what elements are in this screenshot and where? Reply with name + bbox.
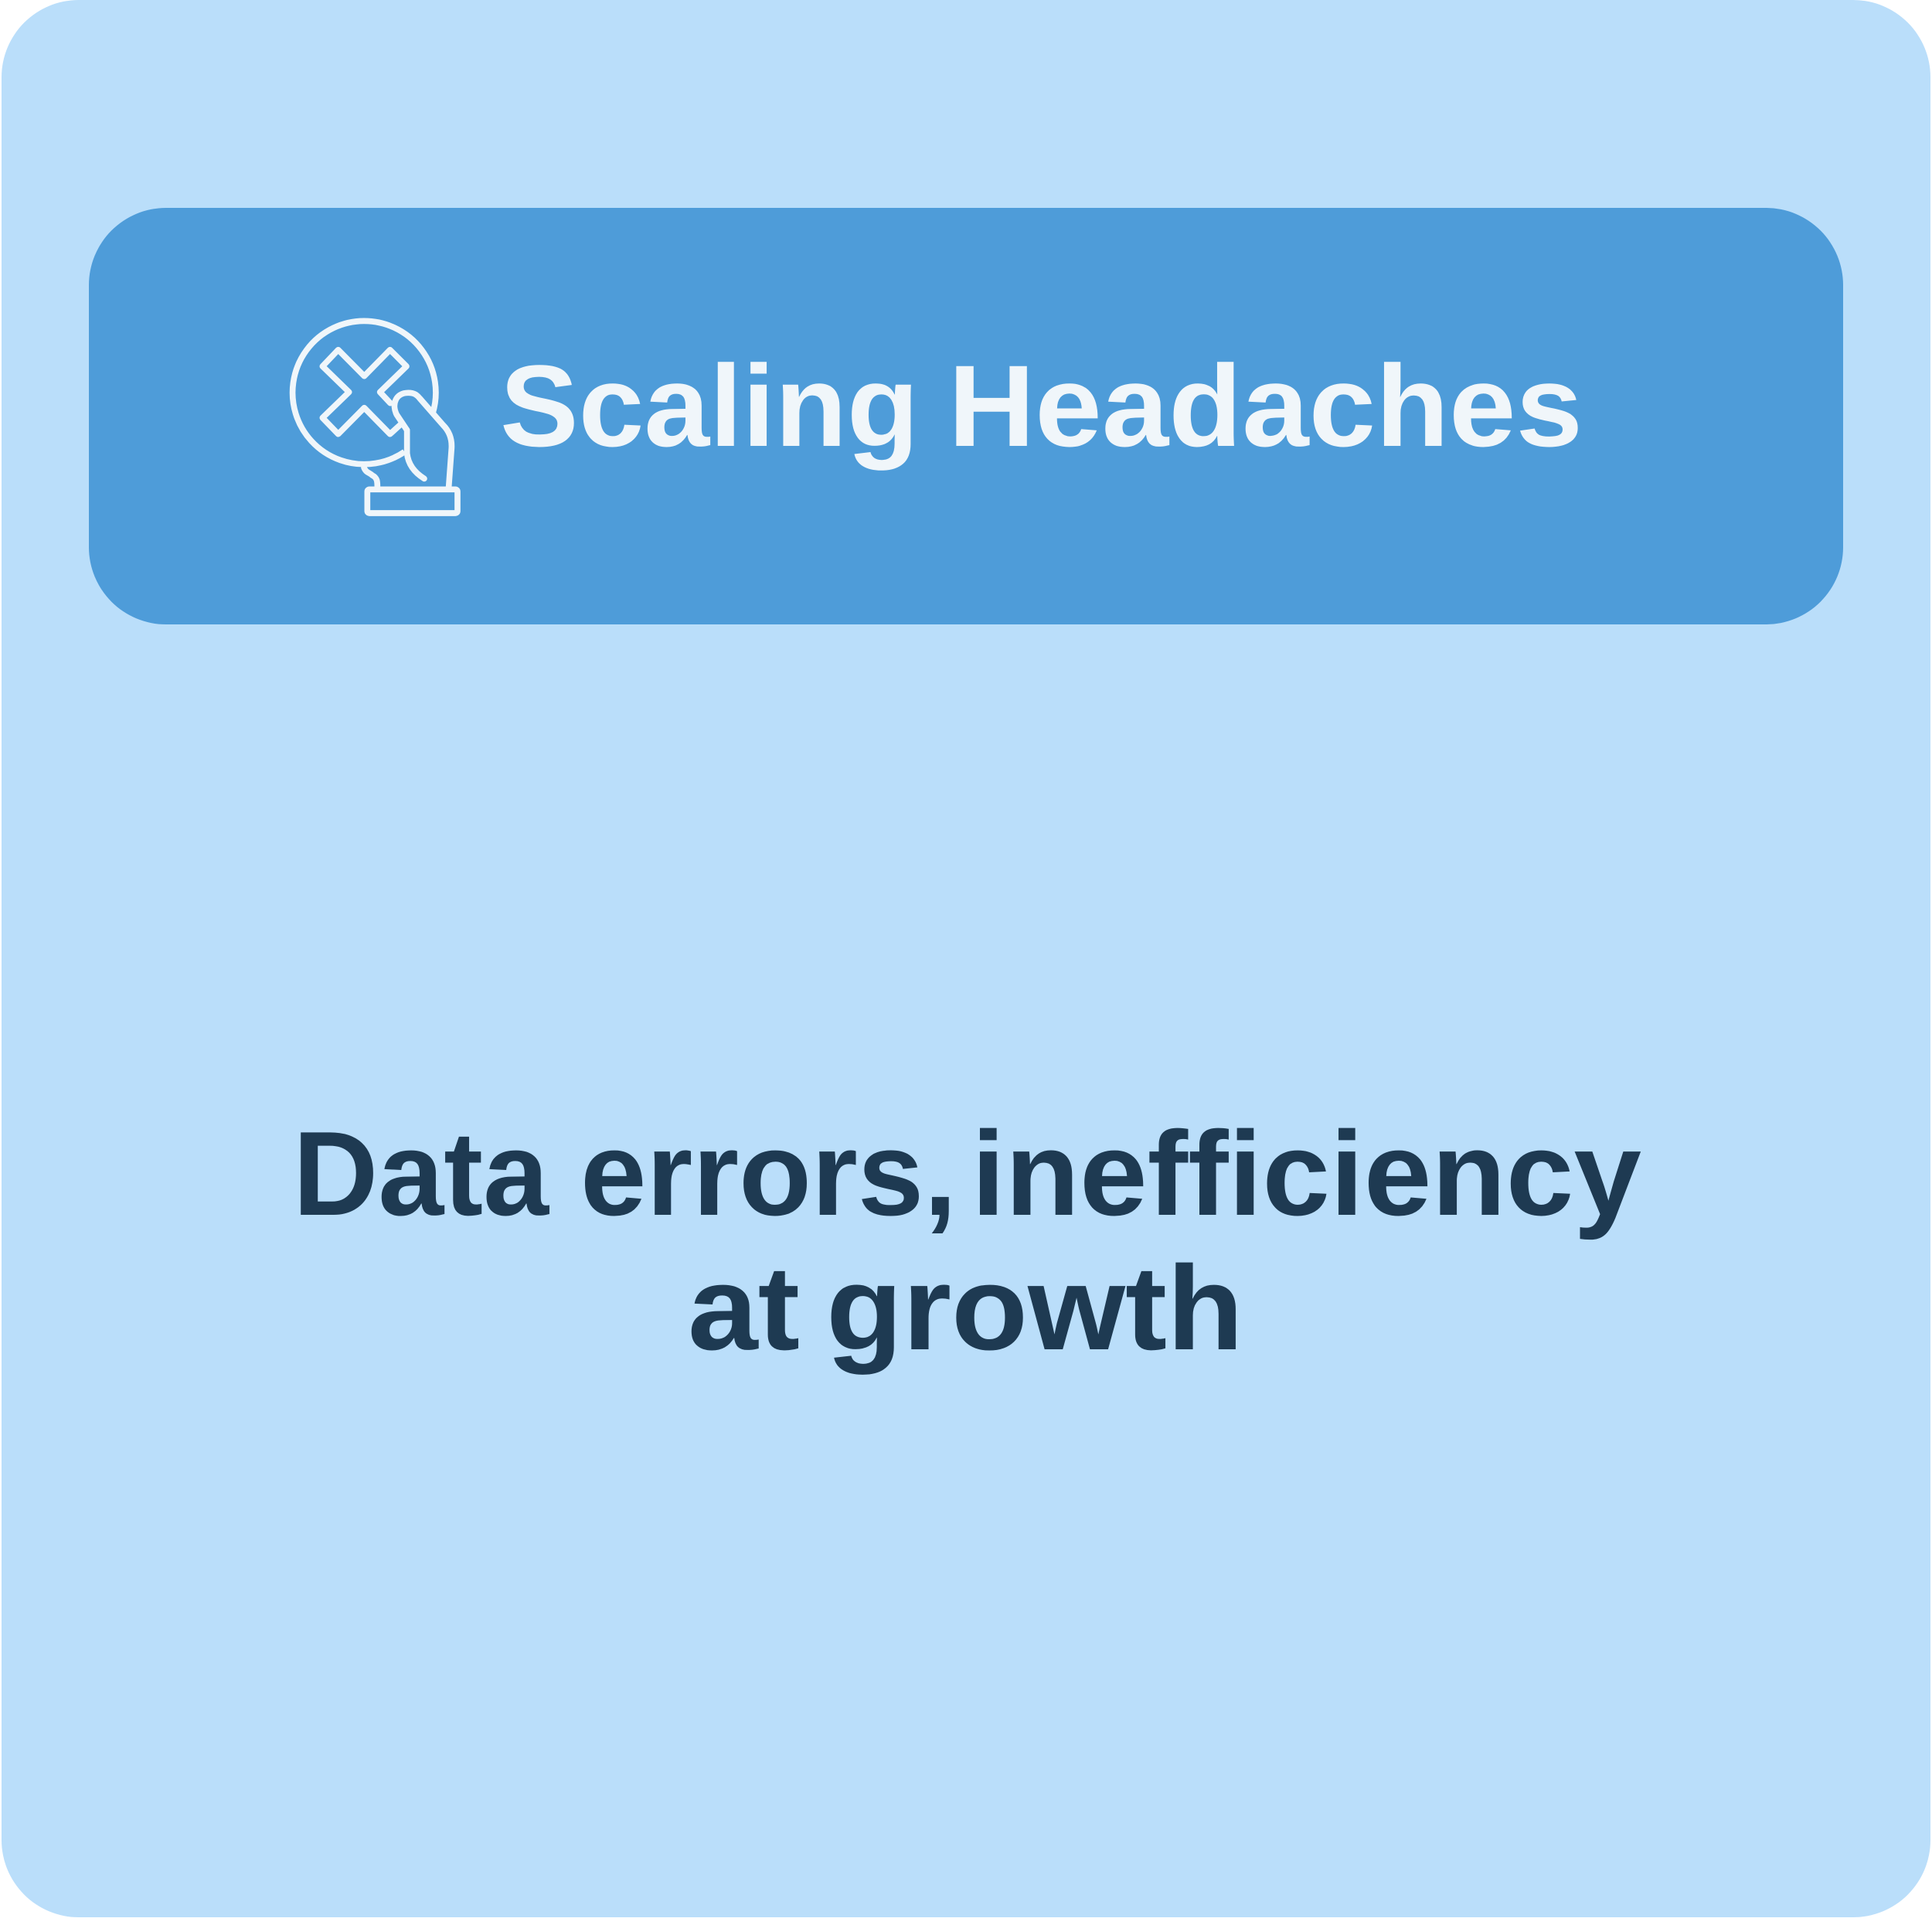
- icon: hand holding a cross badge: [293, 321, 457, 513]
- description line 1: inefficiency: [971, 1107, 1641, 1240]
- description line 1: Data: [293, 1107, 550, 1240]
- text block: description: [293, 1107, 1641, 1375]
- header panel background: [89, 208, 1843, 624]
- description line 1: errors,: [580, 1107, 957, 1240]
- description line 2: growth: [826, 1241, 1243, 1375]
- heading: Scaling Headaches: Scaling: [500, 341, 919, 471]
- heading: Scaling Headaches: Headaches: [948, 341, 1583, 471]
- description line 2: at: [688, 1241, 800, 1375]
- panel: header: [89, 208, 1843, 624]
